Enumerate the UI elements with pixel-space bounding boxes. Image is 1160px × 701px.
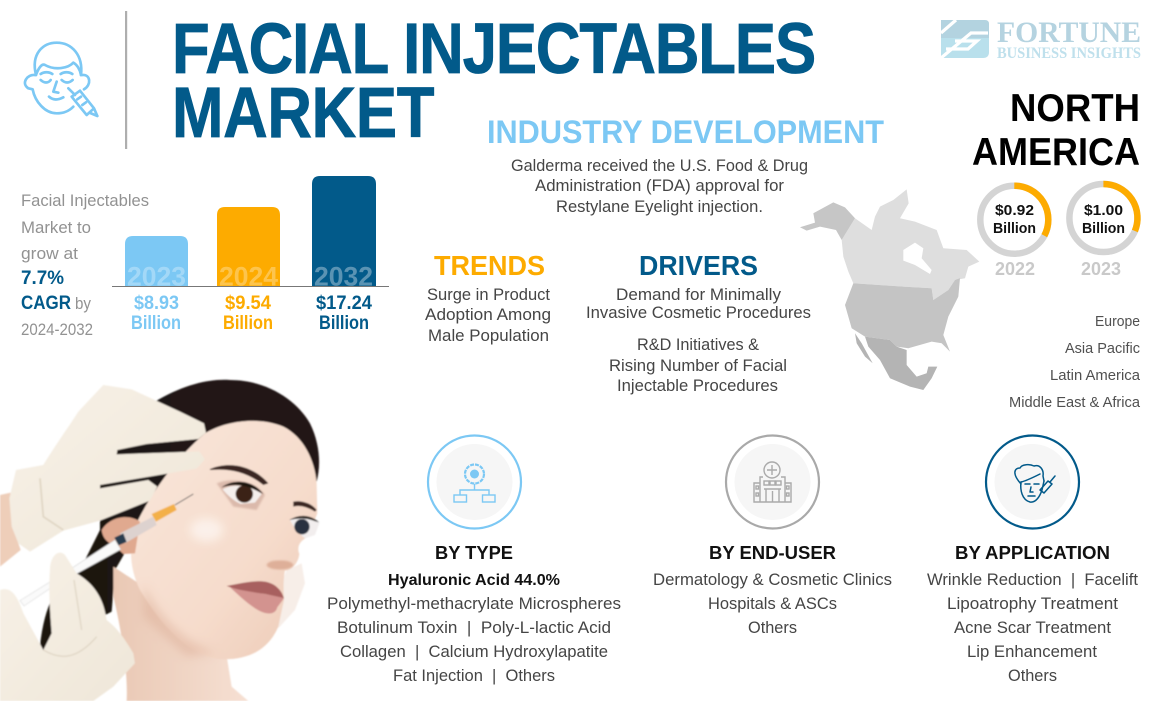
photo: woman receiving facial injection <box>0 380 319 701</box>
list: other regions <box>1009 314 1141 411</box>
Canada <box>842 189 979 300</box>
text: market growth summary: CAGR <box>21 293 71 314</box>
hair <box>39 380 319 653</box>
panel: drivers: Injectable Procedures <box>617 377 778 395</box>
text: industry development: Restylane Eyelight injection. <box>556 198 763 216</box>
donut: 2022: $0.92 <box>995 202 1034 219</box>
panel: trends <box>425 250 551 345</box>
bar: 2032: $17.24 <box>316 293 372 314</box>
panel: by end-user: Others <box>748 619 797 637</box>
panel: by type: Collagen | Calcium Hydroxylapatite <box>340 643 608 661</box>
panel: by application: Others <box>1008 667 1057 685</box>
panel: by type: BY TYPE <box>435 543 513 563</box>
far cheek <box>273 563 305 628</box>
divider <box>125 11 127 149</box>
bar: 2023: 2023 <box>127 262 186 292</box>
list: other regions: Latin America <box>1050 368 1141 384</box>
text: market growth summary: Market to <box>21 218 91 237</box>
Mexico <box>855 333 937 390</box>
cheek highlight <box>190 518 223 542</box>
panel: drivers: Demand for Minimally <box>616 286 782 304</box>
panel: by application: BY APPLICATION <box>955 543 1110 563</box>
bar: 2023 <box>125 236 188 334</box>
forearm <box>0 493 21 567</box>
lips <box>227 581 284 598</box>
heading: industry development: INDUSTRY DEVELOPMENT <box>487 114 884 150</box>
panel: drivers: R&D Initiatives & <box>637 336 759 354</box>
logo: Fortune Business Insights: FORTUNE <box>997 16 1141 49</box>
panel: by application: Lipoatrophy Treatment <box>947 595 1118 613</box>
panel: by application: Lip Enhancement <box>967 643 1097 661</box>
list: other regions: Middle East & Africa <box>1009 395 1141 411</box>
eye and brow <box>210 465 268 485</box>
bar: 2024: $9.54 <box>225 293 271 314</box>
syringe <box>20 494 193 606</box>
logo: Fortune Business Insights <box>941 16 1141 62</box>
Alaska <box>800 202 855 240</box>
panel: trends: Adoption Among <box>425 306 551 324</box>
bar: 2024 <box>217 207 280 334</box>
panel: by type: Polymethyl-methacrylate Microspheres <box>327 595 621 613</box>
panel: drivers: Invasive Cosmetic Procedures <box>586 304 811 322</box>
heading: North America: NORTH <box>1010 87 1140 130</box>
text: industry development: Administration (FDA) approval for <box>535 177 785 195</box>
donut: 2023: Billion <box>1082 220 1125 237</box>
panel: by end-user: BY END-USER <box>709 543 836 563</box>
panel: drivers: DRIVERS <box>639 250 758 281</box>
list: other regions: Asia Pacific <box>1065 341 1140 357</box>
panel: trends: Male Population <box>428 327 549 345</box>
donut: 2023: $1.00 <box>1084 202 1123 219</box>
panel: by type: Fat Injection | Others <box>393 667 555 685</box>
bar: 2023: Billion <box>131 313 181 334</box>
donut: 2022: 2022 <box>995 259 1035 279</box>
donut: 2023 <box>1069 184 1137 279</box>
text: market growth summary <box>21 191 149 339</box>
panel: by end-user <box>653 436 892 637</box>
bar: 2024: 2024 <box>219 262 278 292</box>
panel: by end-user: Hospitals & ASCs <box>708 595 837 613</box>
text: industry development: Galderma received the U.S. Food & Drug <box>511 157 808 175</box>
panel: drivers: Rising Number of Facial <box>609 357 787 375</box>
text: market growth summary: 2024-2032 <box>21 320 93 339</box>
neck and shoulder <box>113 567 248 701</box>
icon: gear and flow chart <box>428 436 521 528</box>
panel: trends: Surge in Product <box>427 286 550 304</box>
USA <box>845 278 960 352</box>
text: market growth summary: by <box>75 294 91 313</box>
heading: North America <box>972 87 1140 174</box>
bar chart <box>112 176 389 334</box>
map: North America <box>800 189 979 390</box>
donut: 2022 <box>980 186 1048 279</box>
bar: 2032: 2032 <box>314 262 373 292</box>
icon: face with injection <box>986 436 1079 528</box>
panel: by application <box>927 436 1138 685</box>
icon: hospital <box>726 436 819 528</box>
donut: 2023: 2023 <box>1081 259 1121 279</box>
text: market growth summary: grow at <box>21 244 78 263</box>
panel: drivers <box>586 250 811 395</box>
panel: by type: Hyaluronic Acid 44.0% <box>388 572 560 589</box>
list: other regions: Europe <box>1095 314 1140 330</box>
upper glove <box>9 385 206 552</box>
lower glove <box>0 553 135 701</box>
panel: by end-user: Dermatology & Cosmetic Clinics <box>653 571 892 589</box>
title: FACIAL INJECTABLES <box>172 10 815 89</box>
text: industry development <box>511 157 808 216</box>
face <box>131 421 317 659</box>
bar: 2024: Billion <box>223 313 273 334</box>
jaw shading <box>143 583 217 657</box>
nose shading <box>267 560 293 570</box>
panel: by application: Wrinkle Reduction | Facelift <box>927 571 1138 589</box>
bar: 2032 <box>312 176 376 334</box>
ear <box>102 517 140 554</box>
panel: trends: TRENDS <box>434 250 545 281</box>
bar: 2023: $8.93 <box>134 293 179 314</box>
text: market growth summary: Facial Injectables <box>21 191 149 210</box>
bar: 2032: Billion <box>319 313 369 334</box>
title: MARKET <box>172 74 434 153</box>
title <box>172 10 815 153</box>
icon: face with syringe <box>25 43 97 116</box>
far eye <box>293 501 317 512</box>
panel: by application: Acne Scar Treatment <box>954 619 1111 637</box>
text: market growth summary: 7.7% <box>21 268 64 289</box>
panel: by type: Botulinum Toxin | Poly-L-lactic Acid <box>337 619 611 637</box>
panel: by type <box>327 436 621 685</box>
logo: Fortune Business Insights: BUSINESS INSIGHTS <box>997 45 1141 62</box>
Hudson Bay <box>903 243 932 274</box>
heading: North America: AMERICA <box>972 131 1140 174</box>
donut: 2022: Billion <box>993 220 1036 237</box>
